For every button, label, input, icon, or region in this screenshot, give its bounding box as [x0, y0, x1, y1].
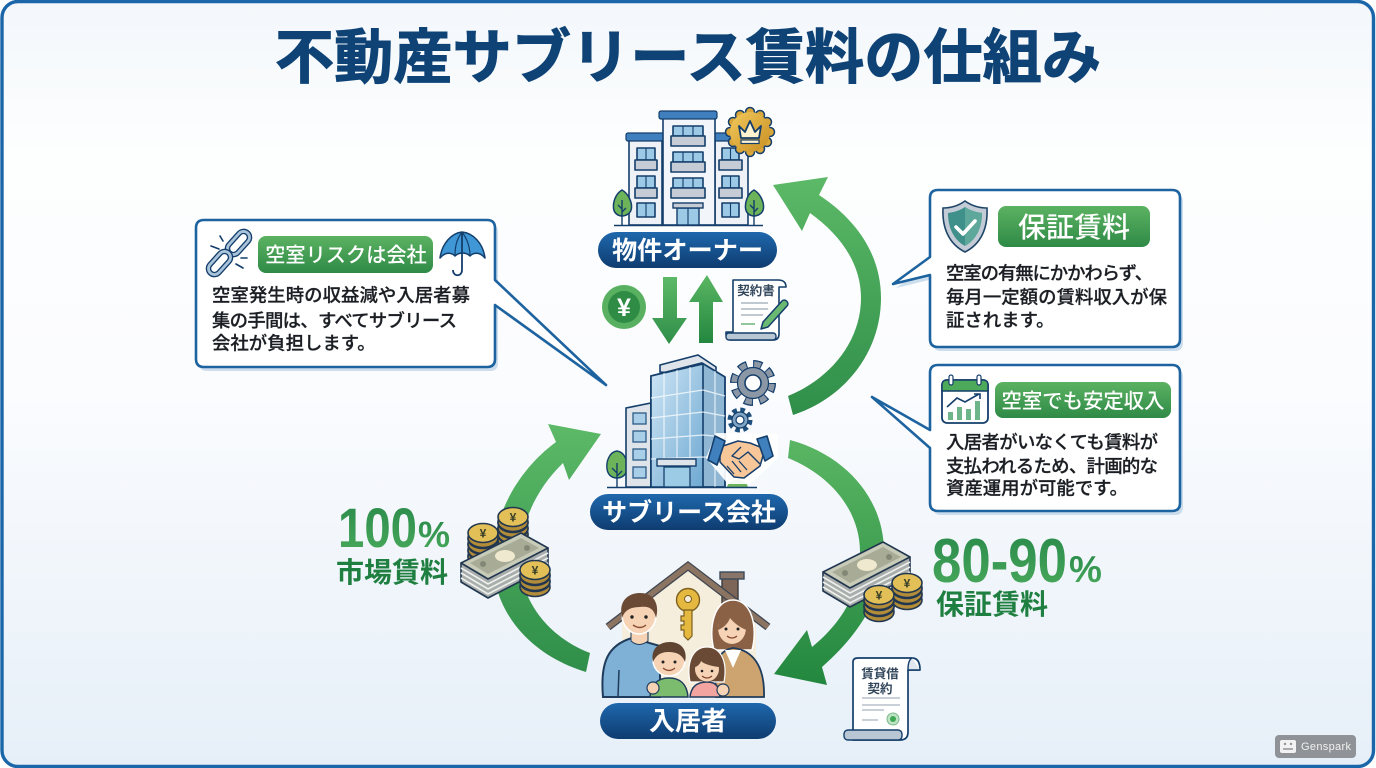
callout text: 会社が負担します。: [212, 332, 376, 354]
stat label: 保証賃料: [936, 589, 1048, 620]
callout text: 毎月一定額の賃料収入が保: [946, 286, 1168, 308]
callout text: 入居者がいなくても賃料が: [946, 432, 1158, 452]
callout text: [946, 432, 1158, 498]
icon: father: [602, 593, 660, 697]
callout: guaranteed rent: [893, 190, 1183, 351]
callout text: [946, 262, 1168, 330]
sublease company node: [590, 355, 788, 530]
stat label: 市場賃料: [336, 557, 448, 588]
icon: large gear: [734, 364, 772, 402]
icon: lease contract: 契約: [867, 681, 893, 696]
tenant node: [600, 566, 776, 739]
icon: small gear: [730, 410, 750, 430]
stat value: 80-90: [932, 527, 1067, 596]
callout text: 支払われるため、計画的な: [946, 456, 1158, 476]
stat value: %: [1069, 549, 1102, 590]
arrow: sublease company to tenant: [774, 440, 884, 685]
title: 不動産サブリース賃料の仕組み: [275, 25, 1101, 91]
coin stack: ¥: [480, 526, 487, 540]
stat: 80-90% guaranteed rent: [932, 527, 1102, 620]
icon: yen coin: [602, 285, 646, 329]
icon: lease contract: 賃貸借: [861, 666, 899, 681]
banknotes: [461, 533, 548, 598]
callout text: 空室の有無にかかわらず、: [946, 262, 1153, 284]
callout text: 集の手間は、すべてサブリース: [212, 310, 457, 331]
watermark badge: [1275, 735, 1356, 758]
icon: handshake: [706, 433, 778, 484]
money icon: guaranteed rent: [823, 542, 922, 622]
icon: mother: [712, 600, 764, 697]
heading pill: [995, 382, 1171, 418]
heading pill: 空室リスクは会社: [265, 244, 427, 267]
coin stack: ¥: [532, 564, 539, 578]
trees: [613, 190, 764, 225]
heading pill: [258, 236, 433, 273]
stat: 100% market rent: [336, 496, 450, 588]
callout shape: [872, 365, 1183, 515]
stat value: %: [418, 514, 450, 555]
icon: broken chain: [206, 229, 252, 277]
icon: son: [647, 642, 688, 697]
label pill: [600, 703, 776, 739]
arrow: rent down: [652, 277, 687, 344]
callout: vacancy risk: [196, 220, 609, 389]
arrow: sublease company to owner: [773, 177, 881, 415]
icon: shield: [943, 201, 987, 252]
icon: office building: [607, 355, 757, 488]
callout text: 空室発生時の収益減や入居者募: [212, 284, 470, 306]
label pill: サブリース会社: [602, 498, 776, 527]
label pill: 物件オーナー: [612, 237, 763, 265]
watermark badge: Genspark: [1301, 741, 1352, 753]
callout shape: [196, 220, 609, 389]
icon: contract and pen: [726, 280, 788, 340]
icon: yen coin: ¥: [617, 294, 631, 322]
callout: stable income: [872, 365, 1183, 515]
money icon: market rent: [461, 508, 550, 598]
callout text: 証されます。: [946, 310, 1055, 330]
callout shape: [893, 190, 1183, 351]
label pill: [590, 494, 788, 530]
icon: daughter: [689, 647, 729, 697]
icon: apartment building: [613, 111, 764, 226]
callout text: [212, 284, 470, 354]
icon: lease contract: [844, 658, 920, 740]
coin stack: ¥: [904, 576, 911, 590]
icon: calendar chart: [942, 375, 988, 423]
icon: house with key: [608, 566, 768, 695]
banknotes: [823, 542, 910, 607]
coin stack: ¥: [876, 588, 883, 602]
icon: crown badge: [726, 108, 774, 156]
heading pill: 空室でも安定収入: [1001, 390, 1165, 413]
heading pill: 保証賃料: [1018, 212, 1130, 243]
stat value: 100: [338, 496, 417, 559]
icon: umbrella: [440, 232, 485, 275]
heading pill: [998, 206, 1150, 247]
icon: contract and pen: 契約書: [737, 283, 775, 298]
label pill: 入居者: [649, 706, 727, 736]
label pill: [598, 232, 777, 268]
owner node: [598, 108, 777, 268]
coin stack: ¥: [510, 510, 517, 524]
arrow: tenant to sublease company: [493, 424, 601, 672]
arrow: rent up: [689, 275, 723, 343]
callout text: 資産運用が可能です。: [946, 478, 1128, 498]
